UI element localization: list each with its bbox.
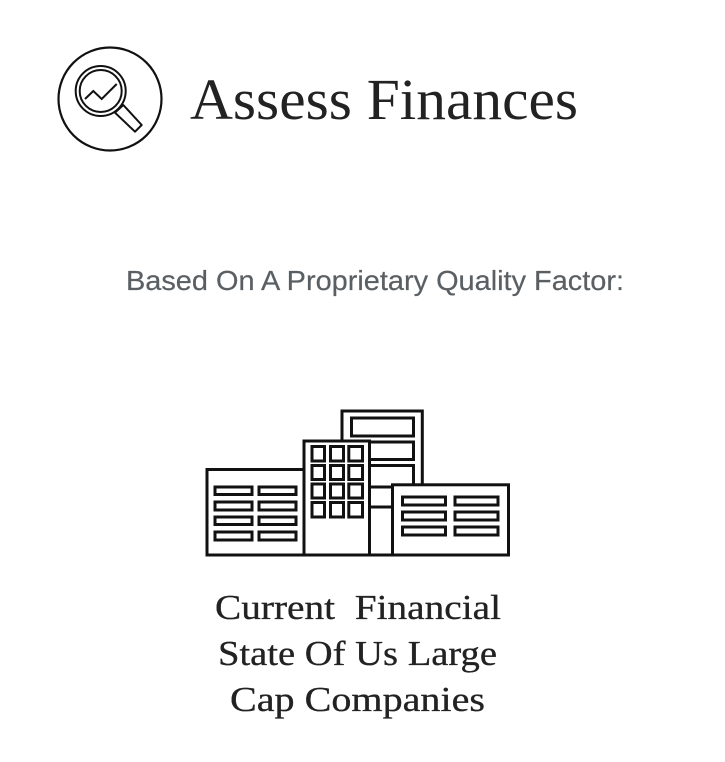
caption: State Of Us Large — [218, 634, 497, 673]
left building — [207, 470, 508, 555]
icon: magnifying glass with chart in circle — [58, 48, 162, 150]
subtitle: Based On A Proprietary Quality Factor: — [126, 265, 624, 296]
icon: office buildings — [207, 411, 508, 555]
caption — [215, 588, 501, 719]
title: Assess Finances — [190, 67, 578, 132]
caption: Cap Companies — [230, 680, 485, 719]
right building — [392, 485, 508, 555]
back tower — [342, 411, 422, 507]
center building — [304, 441, 370, 555]
caption: Current Financial — [215, 588, 501, 627]
